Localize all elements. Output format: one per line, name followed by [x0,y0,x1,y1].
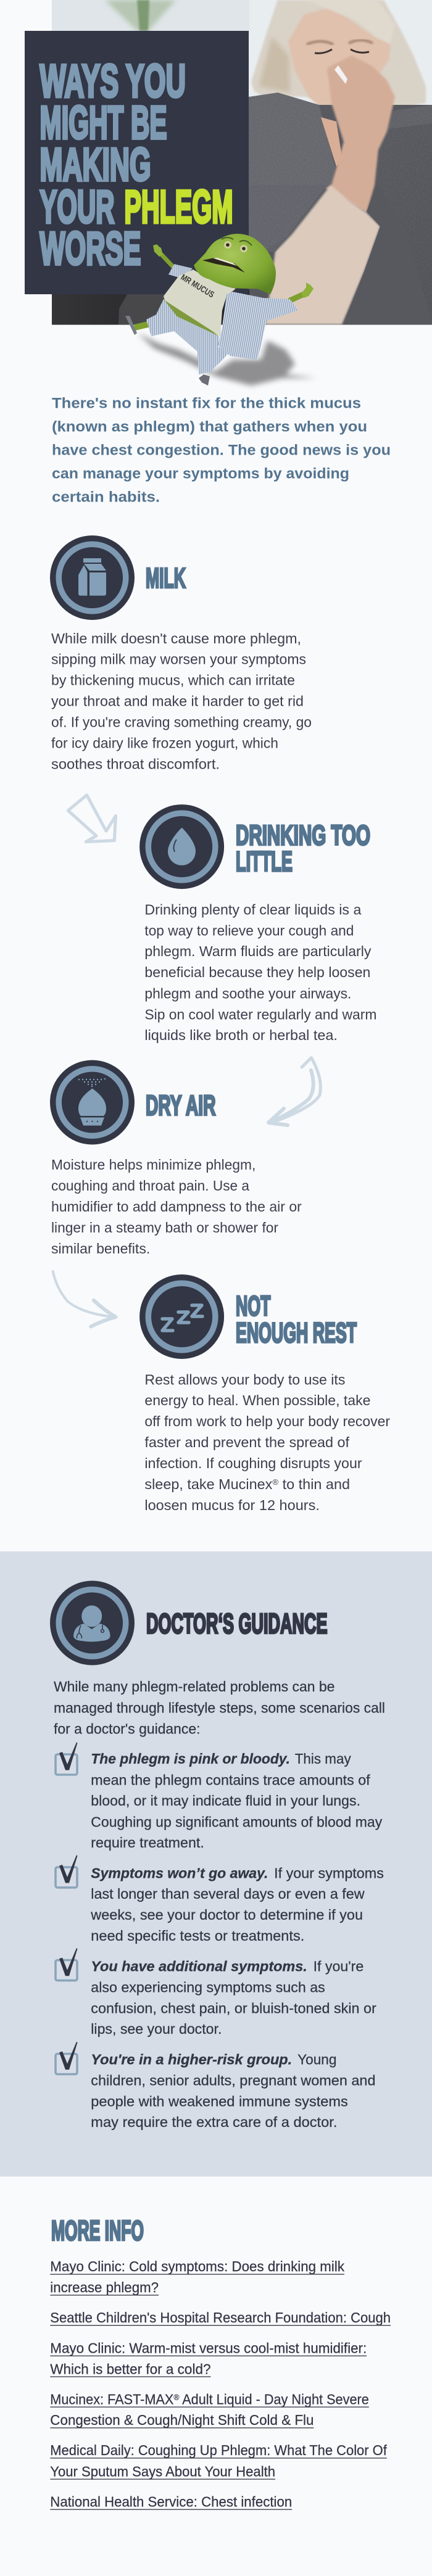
doctor intro text: managed through lifestyle steps, some scenarios call [54,1700,385,1716]
icon: milk carton [50,535,135,620]
icon: water drop [139,804,224,889]
milk text: your throat and make it harder to get rid [51,693,304,709]
hero photo: woman blowing her nose [52,0,432,325]
milk text: sipping milk may worsen your symptoms [51,651,306,667]
link: humidifier: Which is better for a cold? [50,2361,211,2377]
check item: higher-risk group: children, senior adults, pregnant women and [91,2072,376,2088]
title text: YOUR [39,181,115,233]
rest text [144,1371,390,1513]
check item: symptoms won't go away [56,1855,384,1944]
dry air text [51,1157,302,1257]
icon: checkbox [56,2042,78,2074]
title panel [25,31,249,294]
milk text: soothes throat discomfort. [51,756,220,772]
rest text: faster and prevent the spread of [144,1434,350,1450]
intro text: (known as phlegm) that gathers when you [52,418,367,436]
rest text: infection. If coughing disrupts your [144,1455,362,1471]
check item: pink or bloody: The phlegm is pink or bloody. [91,1751,290,1767]
panel: doctor's guidance [0,1551,432,2176]
check item: higher-risk group: You're in a higher-risk group. [91,2051,292,2067]
icon: checkbox [56,1855,78,1888]
drinking text: phlegm. Warm fluids are particularly [144,943,372,959]
link: mucinex [50,2391,369,2428]
rest text: off from work to help your body recover [144,1413,390,1429]
rest text: Rest allows your body to use its [144,1371,345,1387]
milk text: While milk doesn't cause more phlegm, [51,630,301,646]
check item: higher-risk group: Young [297,2051,337,2067]
heading: milk: MILK [146,563,186,593]
milk text [51,630,312,772]
check item: pink or bloody [56,1742,383,1851]
link: medical daily: Your Sputum Says About Your Health [50,2463,275,2479]
icon: checkbox [56,1742,78,1775]
check item: symptoms won't go away: weeks, see your doctor to determine if you [90,1907,363,1923]
check item: pink or bloody: mean the phlegm contains trace amounts of [91,1772,370,1788]
dry air text: linger in a steamy bath or shower for [51,1220,278,1236]
title text: MAKING [39,138,151,190]
intro text: have chest congestion. The good news is you [52,442,391,459]
title text: PHLEGM [125,181,233,233]
heading: drinking too little [236,819,370,877]
icon: zzz [139,1274,224,1359]
title text: WAYS YOU [39,55,186,107]
dry air text: humidifier to add dampness to the air or [51,1199,302,1215]
check item: symptoms won't go away: Symptoms won’t go away. [91,1865,268,1881]
icon: checkbox [56,1948,78,1981]
link: mucinex: Mucinex: FAST-MAX [50,2391,181,2407]
drinking text [144,901,376,1043]
dry air text: coughing and throat pain. Use a [51,1178,249,1194]
link: milk and phlegm [50,2258,344,2295]
intro text: can manage your symptoms by avoiding [52,465,349,482]
check item: symptoms won't go away: last longer than several days or even a few [91,1886,365,1902]
check item: additional symptoms: lips, see your doctor. [91,2021,222,2037]
drinking text: beneficial because they help loosen [144,964,370,980]
pajama pants [146,299,230,374]
link: nhs: National Health Service: Chest infection [50,2493,292,2509]
check item: additional symptoms: also experiencing symptoms such as [91,1979,325,1995]
right arm [290,294,304,300]
check item: additional symptoms: You have additional symptoms. [91,1958,307,1974]
heading: more info: MORE INFO [51,2215,144,2247]
doctor intro text: for a doctor's guidance: [54,1720,200,1736]
character shadow [138,333,317,386]
drinking text: Drinking plenty of clear liquids is a [144,901,362,917]
intro text: There's no instant fix for the thick mucus [52,395,361,411]
check item: pink or bloody: This may [295,1751,351,1767]
check item: additional symptoms [56,1948,376,2037]
undershirt [164,270,236,336]
link: humidifier [50,2340,367,2377]
link: milk and phlegm: Mayo Clinic: Cold symptoms: Does drinking milk [50,2258,344,2274]
link: humidifier: Mayo Clinic: Warm-mist versus cool-mist humidifier: [50,2340,367,2356]
check item: pink or bloody: require treatment. [91,1835,204,1851]
link: medical daily: Medical Daily: Coughing Up Phlegm: What The Color Of [50,2442,387,2458]
pajama sleeve left [168,264,193,279]
drinking text: Sip on cool water regularly and warm [144,1006,376,1022]
shirt label: MR MUCUS [179,272,216,299]
link: mucinex: Congestion & Cough/Night Shift Cold & Flu [50,2412,314,2428]
eyes [222,237,252,252]
doctor intro text [54,1678,385,1736]
pajama top [218,292,298,360]
rest text: energy to heal. When possible, take [144,1392,370,1408]
lower slipper [199,374,210,386]
link: milk and phlegm: increase phlegm? [50,2279,159,2295]
link: mucinex: Adult Liquid - Day Night Severe [179,2391,369,2407]
arrow: drinking to dry air [268,1058,320,1125]
check item: symptoms won't go away: If your symptoms [274,1865,384,1881]
rest text: sleep, take Mucinex [144,1476,270,1492]
milk text: by thickening mucus, which can irritate [51,672,295,688]
title text: MIGHT BE [39,97,167,149]
check item: higher-risk group [56,2042,375,2130]
heading: dry air: DRY AIR [146,1089,216,1121]
left leg [135,324,150,328]
character: Mr. Mucus [125,234,314,386]
check item: symptoms won't go away: need specific tests or treatments. [91,1928,304,1944]
icon: humidifier [50,1060,135,1145]
title text [39,55,233,275]
dry air text: similar benefits. [51,1241,150,1257]
link: seattle children's: Seattle Children's Hospital Research Foundation: Cough [50,2310,391,2326]
arrow: milk to drinking [68,795,116,842]
link: mucinex: ® [173,2392,180,2401]
check item: additional symptoms: confusion, chest pain, or bluish-toned skin or [91,2000,376,2017]
rest text: to thin and [278,1476,350,1492]
belly [164,299,219,336]
heading: not enough rest: NOT [236,1290,270,1321]
link: medical daily [50,2442,387,2480]
drinking text: top way to relieve your cough and [144,923,354,939]
check item: pink or bloody: blood, or it may indicate fluid in your lungs. [91,1793,360,1809]
check item: additional symptoms: If you're [314,1958,363,1974]
heading: not enough rest [236,1290,357,1348]
milk text: for icy dairy like frozen yogurt, which [51,735,278,751]
mouth [202,258,245,273]
intro text [52,395,391,506]
dry air text: Moisture helps minimize phlegm, [51,1157,255,1173]
drinking text: liquids like broth or herbal tea. [144,1027,338,1043]
arrow: dry air to rest [53,1271,116,1326]
check item: higher-risk group: people with weakened immune systems [91,2093,348,2109]
title text: WORSE [39,223,141,275]
check item: pink or bloody: Coughing up significant amounts of blood may [91,1814,383,1830]
milk text: of. If you're craving something creamy, go [51,714,312,730]
intro text: certain habits. [52,489,160,506]
drinking text: phlegm and soothe your airways. [144,985,351,1001]
left arm [162,255,173,266]
icon: doctor [50,1580,135,1666]
heading: drinking too little: LITTLE [236,846,293,877]
more info links [50,2258,391,2510]
left slipper [125,316,137,335]
rest text: ® [272,1477,279,1487]
rest text: loosen mucus for 12 hours. [144,1497,320,1513]
doctor intro text: While many phlegm-related problems can be [54,1678,334,1695]
check item: higher-risk group: may require the extra care of a doctor. [91,2114,337,2130]
head [194,234,276,294]
